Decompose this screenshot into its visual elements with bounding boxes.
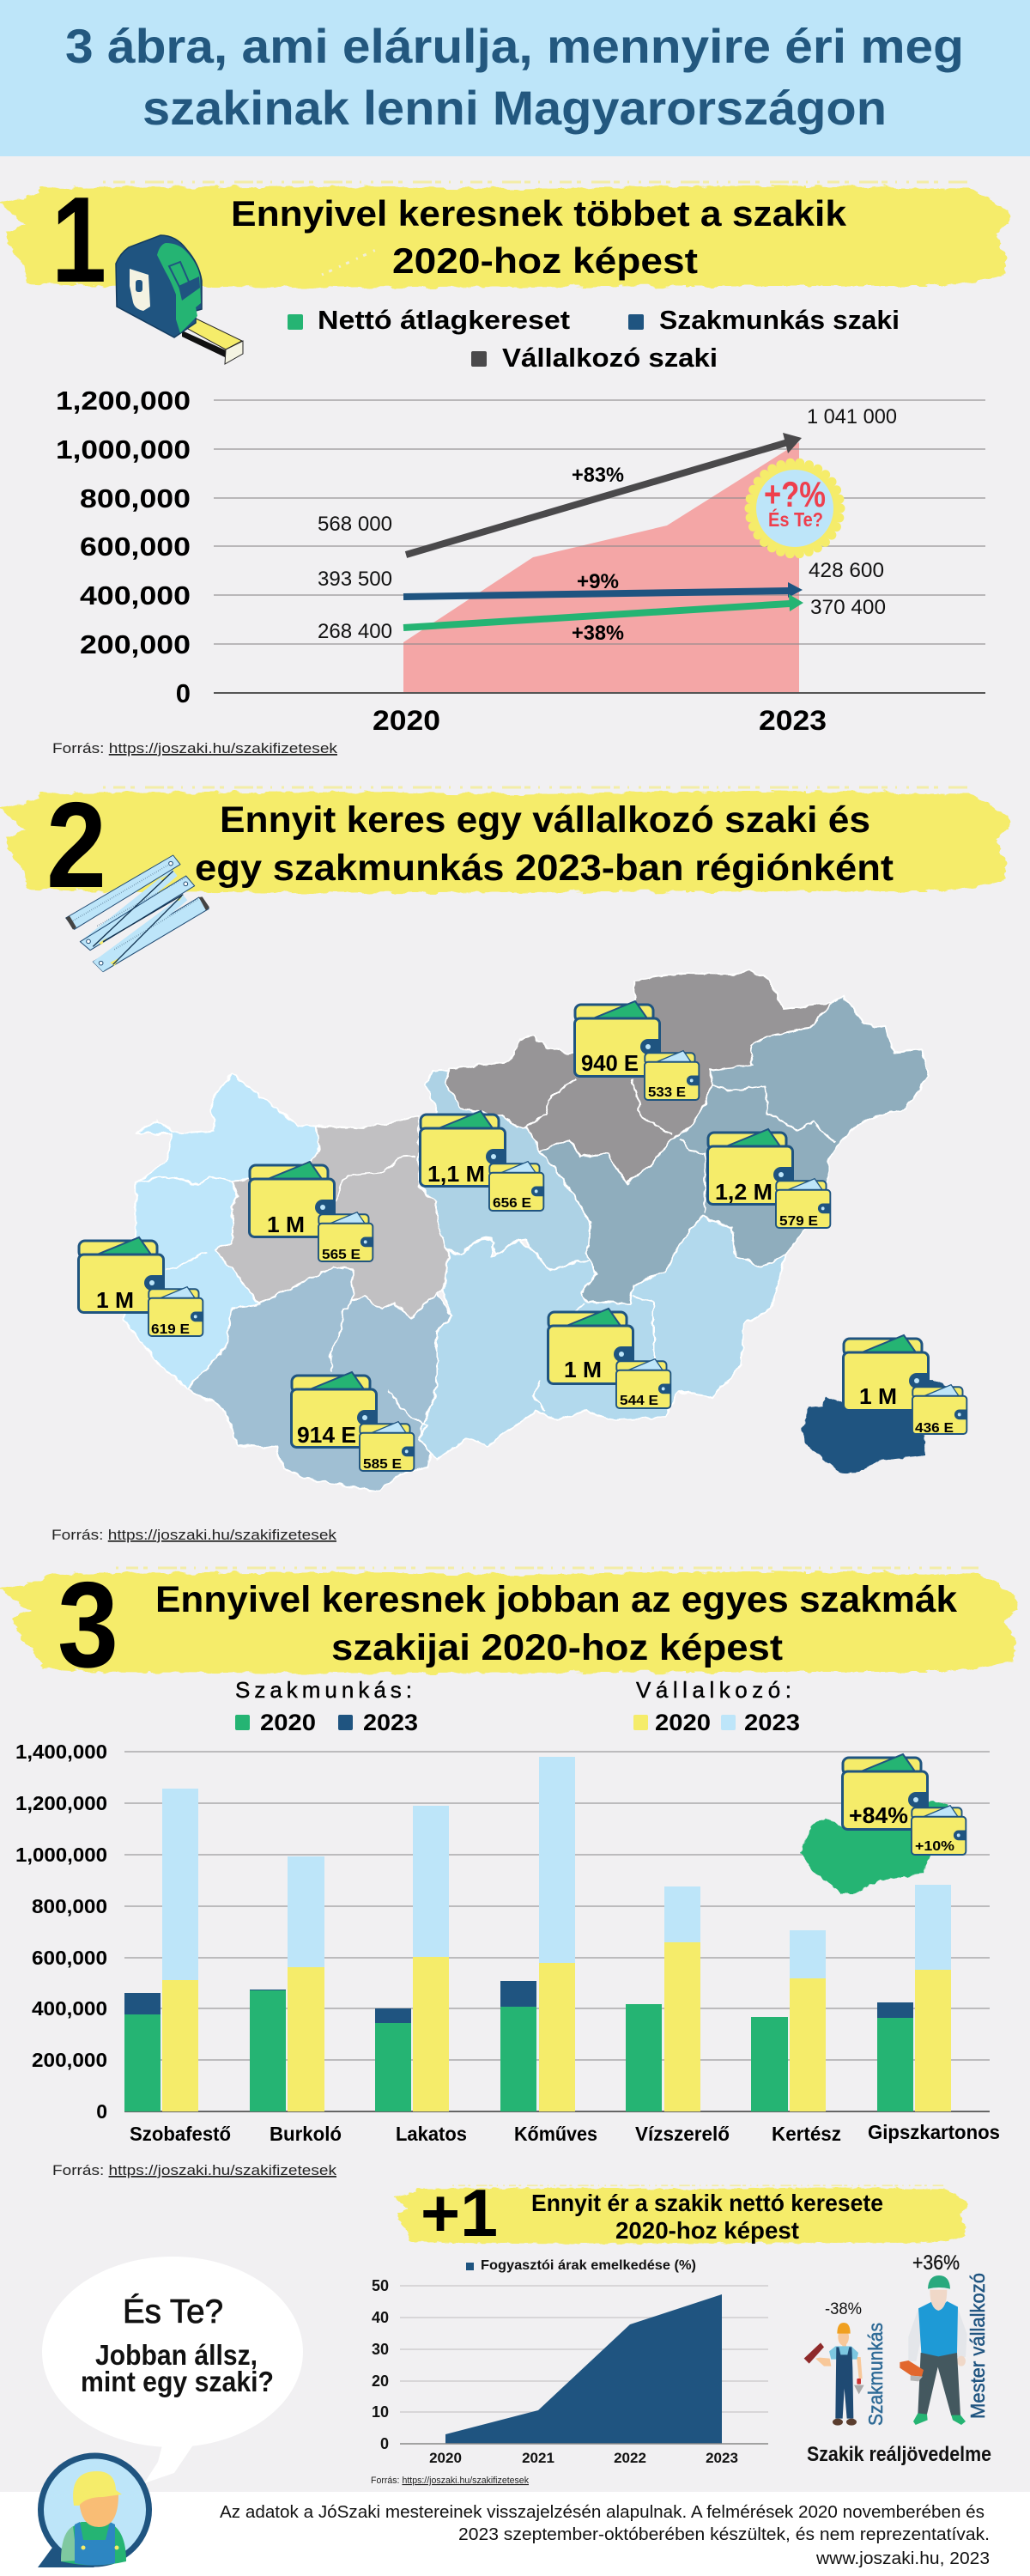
section 3 banner bbox=[0, 1557, 1018, 1693]
middle segment bbox=[80, 876, 195, 951]
number 1: 1 bbox=[52, 172, 106, 308]
percent labels: +9% bbox=[577, 570, 619, 593]
green map with percent wallets bbox=[801, 1754, 966, 1893]
source 3: Forrás: https://joszaki.hu/szakifizetesek bbox=[52, 2162, 337, 2178]
y axis labels: 1,400,000 bbox=[15, 1741, 107, 1763]
region: North Great Plain bbox=[539, 996, 930, 1303]
value labels: 370 400 bbox=[810, 596, 886, 619]
wallet: national average bbox=[843, 1335, 967, 1436]
value labels bbox=[318, 405, 897, 643]
percent labels: +83% bbox=[572, 464, 624, 487]
inflation legend: Fogyasztói árak emelkedése (%) bbox=[481, 2258, 696, 2273]
y axis labels: 0 bbox=[96, 2100, 107, 2123]
section 2 heading: egy szakmunkás 2023-ban régiónként bbox=[195, 848, 894, 889]
footer band bbox=[0, 2492, 1030, 2576]
category labels: Szobafestő bbox=[130, 2123, 231, 2145]
x axis labels: 2020 bbox=[373, 705, 440, 736]
y axis labels: 800,000 bbox=[80, 483, 191, 513]
section 3 heading: Ennyivel keresnek jobban az egyes szakmák bbox=[155, 1579, 957, 1620]
wallet: north: 940 E bbox=[581, 1050, 639, 1076]
arrow: entrepreneur bbox=[406, 433, 802, 555]
section 1 heading: 2020-hoz képest bbox=[392, 240, 698, 281]
title line 2: szakinak lenni Magyarországon bbox=[142, 81, 887, 135]
speech bubble bbox=[42, 2257, 303, 2483]
wallet: west: 1 M bbox=[96, 1287, 134, 1313]
region: Central Transdanubia bbox=[214, 1116, 449, 1318]
wallet: east: 1,2 M bbox=[715, 1179, 772, 1205]
y axis labels: 200,000 bbox=[80, 629, 191, 659]
chart 3 legend: skilled bbox=[235, 1677, 418, 1735]
number 2: 2 bbox=[46, 777, 106, 914]
section 1 heading: Ennyivel keresnek többet a szakik bbox=[231, 193, 847, 234]
category labels: Vízszerelő bbox=[635, 2123, 730, 2145]
percent: skilled worker: -38% bbox=[825, 2300, 862, 2318]
y axis labels: 1,000,000 bbox=[56, 434, 191, 465]
footer note: www.joszaki.hu, 2023 bbox=[815, 2549, 990, 2568]
y labels: 0 bbox=[380, 2435, 389, 2452]
category labels: Kertész bbox=[772, 2123, 841, 2145]
region: Pest bbox=[413, 1071, 593, 1271]
wallet: central west bbox=[249, 1162, 373, 1262]
wallet: east: 579 E bbox=[779, 1214, 818, 1229]
section 1 banner bbox=[0, 172, 1009, 308]
source 1: Forrás: https://joszaki.hu/szakifizetesek bbox=[52, 740, 338, 756]
vertical label: entrepreneur: Mester vállalkozó bbox=[966, 2273, 989, 2419]
fold segment upper bbox=[80, 869, 178, 951]
bubble question bbox=[81, 2339, 274, 2397]
wallet: south plain bbox=[548, 1309, 671, 1408]
y labels bbox=[372, 2277, 389, 2452]
icon: tape measure bbox=[116, 235, 243, 364]
y axis labels: 0 bbox=[176, 678, 191, 708]
region: South Great Plain bbox=[419, 1217, 786, 1460]
figure: skilled worker bbox=[804, 2323, 864, 2426]
wallet: south plain: 1 M bbox=[564, 1357, 602, 1382]
chart 3 legend: skilled: 2023 bbox=[363, 1710, 418, 1735]
map of Hungary regions bbox=[124, 970, 952, 1492]
green map with percent wallets: +10% bbox=[915, 1839, 954, 1854]
section 2 heading: Ennyit keres egy vállalkozó szaki és bbox=[220, 799, 870, 841]
first segment bbox=[66, 855, 180, 929]
fold lines bbox=[93, 871, 183, 964]
region: South Transdanubia bbox=[187, 1267, 451, 1492]
y labels: 10 bbox=[372, 2403, 389, 2421]
value labels: 268 400 bbox=[318, 620, 392, 643]
chart 1 legend bbox=[288, 305, 900, 373]
wallet: Budapest: 656 E bbox=[493, 1196, 531, 1211]
source 4: Forrás: https://joszaki.hu/szakifizetesek bbox=[371, 2476, 529, 2486]
wallet: south plain: 544 E bbox=[620, 1394, 658, 1408]
y axis labels: 1,200,000 bbox=[56, 386, 191, 416]
arrow: skilled worker bbox=[403, 582, 803, 598]
badge: and you bbox=[749, 463, 840, 554]
chart 1 legend: Vállalkozó szaki bbox=[502, 343, 718, 373]
vertical label: skilled worker: Szakmunkás bbox=[864, 2323, 887, 2426]
arrow: net average bbox=[403, 594, 803, 628]
footer note bbox=[220, 2503, 990, 2568]
wallet: central west: 565 E bbox=[322, 1248, 360, 1262]
wallet: national average: 436 E bbox=[915, 1421, 954, 1436]
stacked bar chart by trade bbox=[15, 1741, 1000, 2145]
bars: Lakatos bbox=[375, 1806, 449, 2111]
badge: and you: És Te? bbox=[768, 507, 823, 531]
value labels: 393 500 bbox=[318, 568, 392, 591]
y axis labels: 600,000 bbox=[32, 1947, 107, 1969]
chart 3 legend: skilled: 2020 bbox=[260, 1710, 316, 1735]
y axis labels: 200,000 bbox=[32, 2049, 107, 2071]
wallet: national average: 1 M bbox=[859, 1383, 897, 1409]
number 3: 3 bbox=[58, 1557, 118, 1693]
section 1 heading bbox=[231, 193, 847, 281]
bars: Vízszerelő bbox=[626, 1886, 700, 2111]
y labels: 20 bbox=[372, 2372, 389, 2390]
category labels: Lakatos bbox=[396, 2123, 467, 2145]
wallet: east bbox=[707, 1129, 831, 1229]
region: Northern Hungary bbox=[445, 970, 831, 1183]
y axis labels: 1,000,000 bbox=[15, 1844, 107, 1866]
y axis labels: 400,000 bbox=[32, 1997, 107, 2020]
wallet: central west: 1 M bbox=[267, 1212, 305, 1237]
green map with percent wallets: +84% bbox=[849, 1802, 908, 1828]
wallet: north: 533 E bbox=[648, 1085, 686, 1100]
section 3 heading bbox=[155, 1579, 957, 1668]
+1 heading: Ennyit ér a szakik nettó keresete bbox=[531, 2190, 883, 2216]
chart 3 legend: entrepreneur: 2023 bbox=[744, 1710, 800, 1735]
x labels: 2020 bbox=[429, 2450, 462, 2466]
chart 1 legend: Szakmunkás szaki bbox=[659, 305, 900, 335]
chart 3 legend: entrepreneur: 2020 bbox=[655, 1710, 711, 1735]
percent labels bbox=[572, 464, 624, 645]
y axis labels: 1,200,000 bbox=[15, 1792, 107, 1814]
value labels: 428 600 bbox=[809, 559, 884, 582]
category labels: Kőműves bbox=[514, 2123, 597, 2145]
wallet: south west: 585 E bbox=[363, 1457, 402, 1472]
icon: folding ruler bbox=[66, 855, 209, 972]
value labels: 1 041 000 bbox=[807, 405, 897, 428]
footer note: Az adatok a JóSzaki mestereinek visszajelzésén alapulnak. A felmérések 2020 novemberében és bbox=[220, 2503, 985, 2522]
wallet: west bbox=[79, 1237, 203, 1337]
section 2 banner bbox=[0, 777, 1009, 914]
x labels: 2023 bbox=[706, 2450, 738, 2466]
chart 3 legend: entrepreneur: Vállalkozó: bbox=[636, 1677, 791, 1703]
wallet: Budapest bbox=[421, 1111, 544, 1211]
wallet: north bbox=[575, 1001, 700, 1100]
wallet: south west: 914 E bbox=[297, 1422, 356, 1448]
y axis labels bbox=[15, 1741, 107, 2123]
chart 3 legend: skilled: Szakmunkás: bbox=[235, 1677, 412, 1703]
wallet: Budapest: 1,1 M bbox=[427, 1161, 485, 1187]
fold segment lower bbox=[93, 895, 187, 972]
x axis labels: 2023 bbox=[759, 705, 827, 736]
region: Western Transdanubia bbox=[124, 1073, 319, 1388]
bars: Kőműves bbox=[500, 1757, 575, 2111]
bars: Gipszkartonos bbox=[877, 1885, 951, 2111]
x axis labels bbox=[373, 705, 827, 736]
x labels: 2022 bbox=[614, 2450, 646, 2466]
footer note: 2023 szeptember-októberében készültek, és nem reprezentatívak. bbox=[458, 2525, 990, 2544]
tick marks bbox=[73, 863, 199, 950]
area chart: consumer prices bbox=[372, 2277, 768, 2466]
last segment bbox=[93, 897, 209, 972]
bubble heading: És Te? bbox=[123, 2293, 223, 2330]
y labels: 40 bbox=[372, 2309, 389, 2326]
category labels: Burkoló bbox=[270, 2123, 342, 2145]
chart 3 legend: entrepreneur bbox=[633, 1677, 800, 1735]
header band with title bbox=[0, 0, 1030, 156]
value labels: 568 000 bbox=[318, 513, 392, 536]
y labels: 50 bbox=[372, 2277, 389, 2294]
y axis labels bbox=[56, 386, 191, 708]
category labels: Gipszkartonos bbox=[868, 2121, 1000, 2143]
+1 heading bbox=[531, 2190, 883, 2244]
bubble question: Jobban állsz, bbox=[95, 2339, 258, 2371]
x labels bbox=[429, 2450, 738, 2466]
bubble question: mint egy szaki? bbox=[81, 2366, 274, 2397]
+1 heading: 2020-hoz képest bbox=[615, 2217, 799, 2244]
y axis labels: 600,000 bbox=[80, 532, 191, 562]
+1 banner bbox=[394, 2175, 967, 2251]
percent: entrepreneur: +36% bbox=[912, 2251, 960, 2275]
county borders bbox=[136, 1079, 834, 1468]
y labels: 30 bbox=[372, 2341, 389, 2358]
category labels bbox=[130, 2121, 1000, 2145]
bars: Szobafestő bbox=[124, 1789, 198, 2111]
region: national average blob bbox=[801, 1380, 952, 1473]
x labels: 2021 bbox=[522, 2450, 554, 2466]
real income caption: Szakik reáljövedelme bbox=[807, 2443, 991, 2466]
icon: worker avatar bbox=[38, 2456, 149, 2567]
section 2 heading bbox=[195, 799, 894, 889]
wallet: south west bbox=[292, 1372, 415, 1472]
y axis labels: 800,000 bbox=[32, 1895, 107, 1917]
+1 label: +1 bbox=[421, 2175, 498, 2251]
badge: and you: +?% bbox=[764, 474, 826, 514]
line chart: earnings 2020 vs 2023 bbox=[56, 386, 985, 736]
bars: Kertész bbox=[751, 1930, 826, 2111]
section 3 heading: szakijai 2020-hoz képest bbox=[331, 1627, 783, 1668]
source 2: Forrás: https://joszaki.hu/szakifizetesek bbox=[52, 1527, 337, 1543]
bars: Burkoló bbox=[250, 1856, 324, 2111]
wallet: west: 619 E bbox=[151, 1322, 190, 1337]
pink area: your earnings bbox=[403, 442, 799, 693]
title line 1: 3 ábra, ami elárulja, mennyire éri meg bbox=[65, 19, 964, 73]
percent labels: +38% bbox=[572, 622, 624, 645]
chart 1 legend: Nettó átlagkereset bbox=[318, 305, 570, 335]
figure: master entrepreneur bbox=[900, 2275, 967, 2425]
y axis labels: 400,000 bbox=[80, 580, 191, 611]
